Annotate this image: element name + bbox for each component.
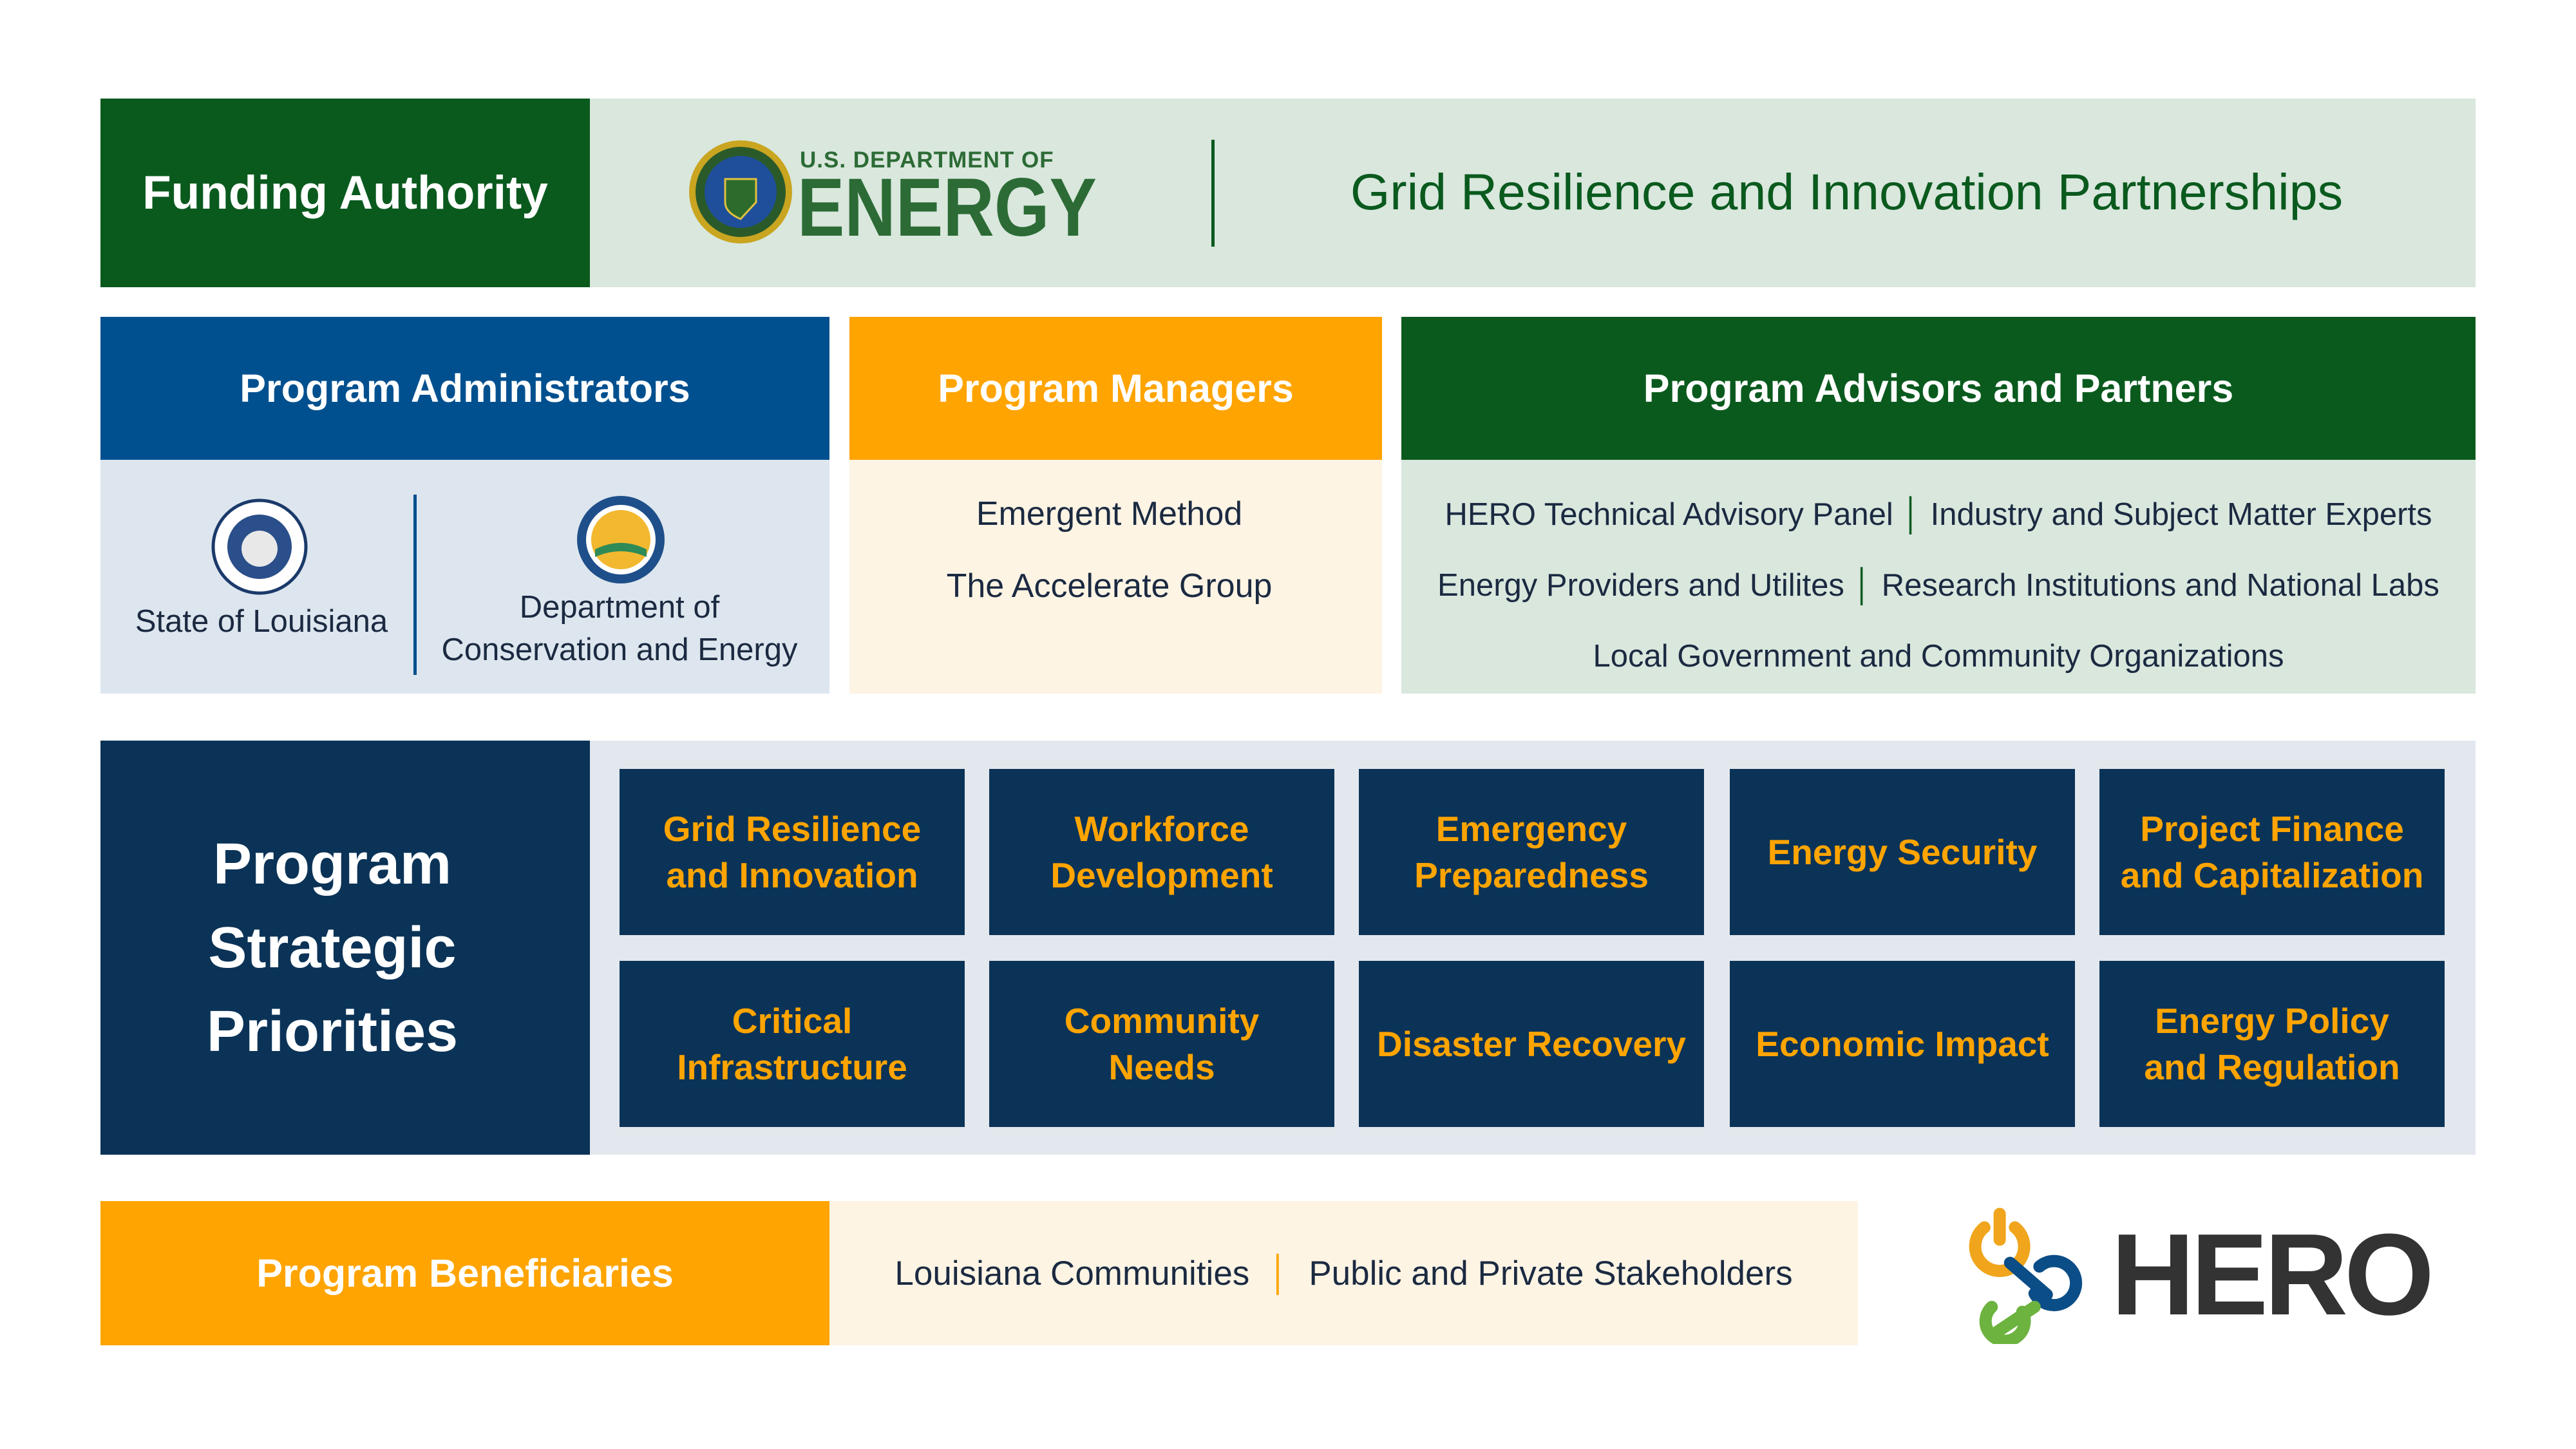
beneficiaries list: Louisiana Communities Public and Private Stakeholders — [895, 1255, 1793, 1292]
panel: program advisors: Energy Providers and Utilites │ Research Institutions and National Labs — [1437, 568, 2439, 603]
priority tiles: Project Finance — [2140, 809, 2404, 849]
panel: program managers: The Accelerate Group — [947, 567, 1272, 605]
priority tiles: Energy Policy — [2155, 1001, 2389, 1041]
title: Grid Resilience and Innovation Partnerships — [1350, 163, 2343, 220]
panel: strategic priorities: Strategic — [208, 916, 457, 980]
priority tiles: Grid Resilience — [663, 809, 921, 849]
logo: HERO — [1969, 1208, 2430, 1344]
beneficiaries list — [829, 1201, 1858, 1345]
icon: DOE seal — [689, 140, 792, 243]
priority tiles: Economic Impact — [1756, 1024, 2049, 1064]
priority tiles: and Capitalization — [2121, 855, 2423, 895]
panel: strategic priorities — [100, 741, 2476, 1155]
panel: program advisors: Local Government and Community Organizations — [1593, 639, 2284, 674]
beneficiaries label — [100, 1201, 829, 1345]
panel: program administrators: Department of — [520, 590, 719, 625]
logo: HERO: HERO — [2111, 1210, 2430, 1340]
panel: strategic priorities: Priorities — [207, 999, 458, 1064]
panel: program advisors: HERO Technical Advisory Panel │ Industry and Subject Matter Experts — [1444, 497, 2432, 532]
priority tiles: and Innovation — [666, 855, 918, 895]
panel: program managers — [849, 317, 1382, 694]
panel: program administrators: State of Louisiana — [135, 604, 388, 639]
priority tiles: Disaster Recovery — [1377, 1024, 1686, 1064]
panel: program managers: Program Managers — [938, 366, 1294, 410]
funding authority label — [100, 99, 590, 287]
funding banner: ENERGY — [797, 162, 1097, 254]
panel: program advisors: Program Advisors and Partners — [1643, 366, 2233, 410]
priority tiles: Preparedness — [1414, 855, 1649, 895]
priority tiles: and Regulation — [2144, 1047, 2400, 1087]
priority tiles: Critical — [732, 1001, 852, 1041]
funding banner — [590, 99, 2476, 287]
beneficiaries label: Program Beneficiaries — [256, 1251, 674, 1295]
priority tiles — [620, 769, 2445, 1127]
priority tiles: Infrastructure — [677, 1047, 907, 1087]
beneficiaries list: │ — [1269, 1255, 1290, 1292]
priority tiles: Development — [1050, 855, 1273, 895]
icon: Louisiana seal — [211, 498, 308, 595]
priority tiles: Community — [1065, 1001, 1259, 1041]
icon: DCE seal — [577, 496, 665, 583]
priority tiles: Workforce — [1074, 809, 1249, 849]
priority tiles: Emergency — [1436, 809, 1627, 849]
priority tiles: Energy Security — [1768, 832, 2037, 872]
panel: program managers: Emergent Method — [976, 495, 1242, 533]
panel: program administrators — [100, 317, 829, 694]
priority tiles: Needs — [1108, 1047, 1215, 1087]
DOE wordmark: U.S. DEPARTMENT OF — [800, 147, 1054, 173]
panel: program administrators: Program Administrators — [240, 366, 690, 410]
funding authority label: Funding Authority — [142, 167, 548, 219]
panel: program advisors — [1401, 317, 2476, 694]
panel: program administrators: Conservation and Energy — [442, 632, 797, 667]
panel: strategic priorities: Program — [213, 832, 451, 896]
